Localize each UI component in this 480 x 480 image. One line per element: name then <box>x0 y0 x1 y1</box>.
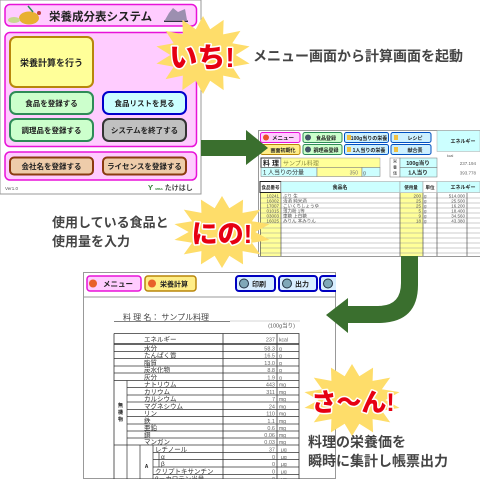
callout: step 1 <box>156 16 250 94</box>
nutrition report table: リン <box>144 410 157 418</box>
nutrition report table: mg <box>279 440 286 446</box>
arrow: menu to calculation <box>201 130 268 165</box>
callout: step 2 <box>174 196 270 268</box>
nutrition report table: 13.0 <box>264 361 275 367</box>
dish name row: サンプル料理 <box>283 160 319 168</box>
ingredients table body: g <box>424 194 427 198</box>
toolbar buttons: 献合表 <box>407 147 423 154</box>
main menu panel <box>5 32 196 146</box>
nutrition report table: マグネシウム <box>144 402 184 410</box>
nutrition report table: 8.8 <box>267 368 275 374</box>
nutrition report table: カリウム <box>144 388 170 396</box>
ingredients table body: 03003 <box>266 214 279 218</box>
ingredients table body: 16002 <box>266 198 279 204</box>
ingredients table body: g <box>424 208 427 214</box>
ingredients table header <box>260 182 480 192</box>
ingredients table body: g <box>424 204 427 208</box>
nutrition value summary: 栄 <box>393 158 397 164</box>
toolbar buttons: 1人当りの栄養 <box>353 147 385 154</box>
ingredients table body: みりん 本みりん <box>283 218 316 224</box>
nutrition value summary: 100g当り <box>406 159 430 167</box>
ingredients table header: 食品番号 <box>262 184 280 191</box>
callout: step 1: いち! <box>169 42 235 73</box>
dish name line <box>114 313 300 328</box>
callout: step 3 <box>304 364 400 436</box>
nutrition report table: μg <box>281 448 287 454</box>
ingredients table body: 清酒 純米酒 <box>283 198 307 204</box>
nutrition report table: β <box>161 461 165 468</box>
nutrition report table: マンガン <box>144 437 170 446</box>
nutrition value summary: 393.778 <box>460 170 476 176</box>
caption: step 1: メニュー画面から計算画面を起動 <box>253 48 463 64</box>
nutrition report table: 亜鉛 <box>144 423 158 432</box>
nutrition report table: mg <box>279 404 286 410</box>
ingredients table header: エネルギー <box>450 184 476 191</box>
nutrition report table: 機 <box>118 409 123 416</box>
button: company <box>10 158 93 174</box>
nutrition report table: 443 <box>266 382 275 388</box>
nutrition report table: 16.5 <box>264 354 275 360</box>
report toolbar: 印刷 <box>252 280 266 288</box>
ingredients table body: 25 <box>416 204 421 208</box>
caption: step 2: 使用している食品と <box>52 215 169 230</box>
nutrition report table: μg <box>281 462 287 468</box>
nutrition report table: mg <box>279 433 286 439</box>
dish name line: (100g当り) <box>268 322 295 330</box>
ingredients table body: 18 <box>416 218 421 224</box>
energy column header <box>437 130 480 158</box>
dish name row: 料 理 <box>263 158 279 168</box>
nutrition report table: mg <box>279 382 286 388</box>
ingredients table body: 25 <box>416 198 421 204</box>
nutrition report table: g <box>279 376 282 382</box>
ingredients table body: 16.200 <box>451 204 465 208</box>
ingredients table body: 01015 <box>266 208 279 214</box>
button: nutrition calc <box>10 37 93 87</box>
nutrition report table: 110 <box>266 412 275 418</box>
toolbar buttons: メニュー <box>272 135 294 142</box>
toolbar buttons: 100g当りの栄養 <box>351 135 387 142</box>
dish name row <box>261 158 380 176</box>
nutrition value summary: 価 <box>393 170 397 176</box>
nutrition report table: 0 <box>272 455 275 461</box>
arrow: calculation to report <box>326 256 418 333</box>
nutrition report table: 0.06 <box>264 433 275 439</box>
ingredients table body: g <box>424 218 427 224</box>
ingredients table body: 車糖 上白糖 <box>283 212 307 220</box>
caption: step 3: 瞬時に集計し帳票出力 <box>308 453 448 469</box>
nutrition report table <box>114 334 299 480</box>
ingredients table body: こいくちしょうゆ <box>283 204 319 210</box>
nutrition report table: 水分 <box>144 344 158 352</box>
ingredients table body: 200 <box>413 194 421 198</box>
ingredients table body: 16025 <box>266 218 279 224</box>
nutrition report table: μg <box>281 470 287 476</box>
button: food list: 食品リストを見る <box>114 98 174 108</box>
ingredients table body: 17007 <box>266 204 279 208</box>
ingredients table body: 10241 <box>266 194 279 198</box>
nutrition report table: クリプトキサンチン <box>155 468 214 476</box>
nutrition report table: エネルギー <box>144 336 176 344</box>
ingredients table body: 25.500 <box>451 198 465 204</box>
nutrition report table: α <box>161 454 165 461</box>
ingredients table header: 使用量 <box>404 184 418 191</box>
nutrition report table: 0 <box>272 462 275 468</box>
ingredients table body: ぶり 生 <box>283 192 298 200</box>
ingredients table header: 食品名 <box>332 184 348 191</box>
toolbar buttons: 画面初期化 <box>270 147 296 154</box>
ingredients table body: g <box>424 198 427 204</box>
nutrition report table: 炭水化物 <box>144 365 170 374</box>
button: register dish <box>10 119 93 141</box>
toolbar buttons: 調理品登録 <box>313 147 339 154</box>
dish name row: 350 <box>350 170 358 176</box>
dish name line: 料 理 名： サンプル料理 <box>123 312 209 322</box>
button: nutrition calc: 栄養計算を行う <box>20 57 83 68</box>
panel: menu screen <box>0 0 201 194</box>
logo: Ƴ MISA たけはし <box>148 184 193 192</box>
nutrition report table: 鉄 <box>144 416 151 425</box>
button: exit: システムを終了する <box>111 125 178 135</box>
nutrition value summary: 養 <box>393 164 397 170</box>
button: register food <box>10 92 93 114</box>
report toolbar: 出力 <box>295 280 309 288</box>
button: license <box>103 158 186 174</box>
energy column header: kcal <box>447 154 453 158</box>
dish name row: 1 人当りの分量 <box>263 168 304 176</box>
nutrition report table: 脂質 <box>144 358 158 367</box>
button: license: ライセンスを登録する <box>107 161 182 171</box>
nutrition report table: 灰分 <box>144 372 158 382</box>
nutrition report table: カルシウム <box>144 395 177 403</box>
nutrition value summary: 237.194 <box>460 161 476 166</box>
nutrition report table: A <box>145 464 149 470</box>
toolbar buttons: 食品登録 <box>316 135 336 142</box>
nutrition report table: 0.03 <box>264 440 275 446</box>
nutrition report table: mg <box>279 397 286 403</box>
report toolbar: 栄養計算 <box>160 280 188 288</box>
nutrition value summary <box>390 158 476 177</box>
nutrition report table: mg <box>279 412 286 418</box>
caption: step 2: 使用量を入力 <box>52 234 130 249</box>
nutrition report table: ナトリウム <box>144 380 177 388</box>
ingredients table body: 514.000 <box>449 194 465 198</box>
ingredients table body: 薄力粉 1等 <box>283 208 305 214</box>
caption: step 3: 料理の栄養価を <box>308 434 406 450</box>
title bar: 栄養成分表システム <box>49 10 152 24</box>
caption: step 3 <box>308 434 448 469</box>
title bar <box>5 4 196 26</box>
nutrition report table: 58.3 <box>264 346 275 352</box>
nutrition report table: g <box>279 346 282 352</box>
toolbar buttons: レシピ <box>407 136 423 142</box>
caption: step 2 <box>52 215 169 249</box>
nutrition report table: g <box>279 354 282 360</box>
ingredients table body: 43.380 <box>451 218 465 224</box>
nutrition report table: 0.6 <box>267 426 275 432</box>
nutrition report table: 1.1 <box>267 419 275 425</box>
nutrition report table: たんぱく質 <box>144 350 177 360</box>
nutrition report table: レチノール <box>155 446 188 454</box>
nutrition report table: 7 <box>272 397 275 403</box>
nutrition report table: mg <box>279 426 286 432</box>
nutrition report table: 37 <box>269 448 275 454</box>
registration panel <box>5 152 196 180</box>
button: register food: 食品を登録する <box>25 98 78 108</box>
nutrition value summary: 1人当り <box>408 168 428 176</box>
ingredients table body: 9 <box>418 214 421 218</box>
nutrition report table: 24 <box>269 404 275 410</box>
panel: report screen <box>84 272 340 480</box>
button: company: 会社名を登録する <box>22 161 82 171</box>
nutrition report table: 無 <box>118 402 123 409</box>
nutrition report table: μg <box>281 455 287 461</box>
report toolbar <box>84 276 340 297</box>
callout: step 3: さ～ん! <box>311 389 395 417</box>
callout: step 2: にの! <box>192 219 252 249</box>
nutrition report table: mg <box>279 390 286 396</box>
ingredients table body: 34.560 <box>451 214 465 218</box>
nutrition report table: mg <box>279 419 286 425</box>
button: food list <box>103 92 186 114</box>
nutrition report table: 237 <box>266 338 275 344</box>
ingredients table body <box>260 192 480 256</box>
ingredients table body: g <box>424 214 427 218</box>
ingredients table body: 5 <box>418 208 421 214</box>
nutrition report table: g <box>279 368 282 374</box>
button: exit <box>103 119 186 141</box>
button: register dish: 調理品を登録する <box>22 125 82 135</box>
nutrition report table: 物 <box>118 416 123 423</box>
nutrition report table: kcal <box>279 338 288 344</box>
dish name row: g <box>363 170 366 176</box>
nutrition report table: g <box>279 361 282 367</box>
energy column header: エネルギー <box>450 138 476 145</box>
panel: calculation screen <box>258 130 480 256</box>
nutrition report table: 銅 <box>144 430 151 439</box>
report toolbar: メニュー <box>103 280 133 288</box>
nutrition report table: 311 <box>266 390 275 396</box>
toolbar buttons <box>260 132 431 154</box>
ingredients table header: 単位 <box>426 184 435 191</box>
nutrition report table: 1.9 <box>267 376 275 382</box>
ingredients table body: 18.400 <box>451 208 465 214</box>
version label: Ver1.0 <box>5 186 19 191</box>
nutrition report table: 0 <box>272 470 275 476</box>
